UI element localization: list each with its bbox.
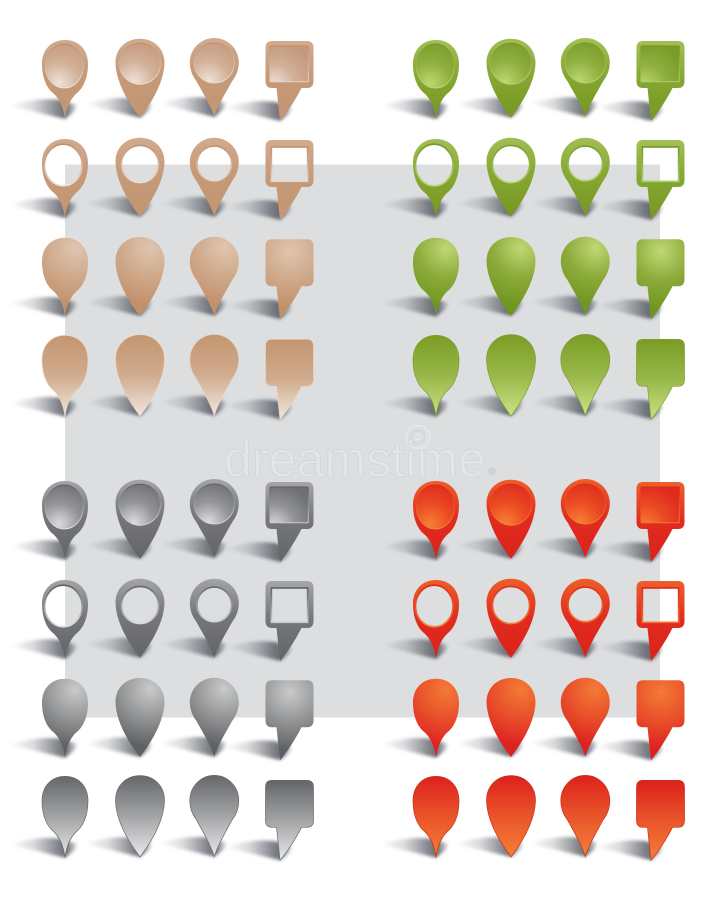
gray pin row 2: ring: [11, 579, 314, 661]
red pin row 3: glossy: [382, 678, 684, 760]
green pin row 2: ring: [382, 138, 684, 220]
tan pin row 1: inset: [11, 38, 314, 121]
tan pin row 2: ring: [11, 138, 314, 220]
tan pin row 3: glossy: [11, 237, 314, 319]
red pin row 1: inset: [382, 479, 684, 562]
green pin row 4: flat gradient: [382, 334, 684, 419]
green pin row 3: glossy: [382, 237, 684, 319]
red pin row 2: ring: [382, 579, 684, 661]
panel: tan pins: [11, 38, 314, 419]
watermark: dreamstime: [224, 432, 486, 488]
green pin row 1: inset: [382, 38, 684, 121]
panel: gray pins: [11, 479, 314, 860]
background panel: gray square: [65, 164, 660, 718]
gray pin row 1: inset: [11, 479, 314, 562]
red pin row 4: flat gradient: [382, 775, 684, 860]
panel: green pins: [382, 38, 684, 419]
tan pin row 4: flat gradient: [11, 334, 314, 419]
gray pin row 3: glossy: [11, 678, 314, 760]
gray pin row 4: flat gradient: [11, 775, 314, 860]
panel: red pins: [382, 479, 684, 860]
